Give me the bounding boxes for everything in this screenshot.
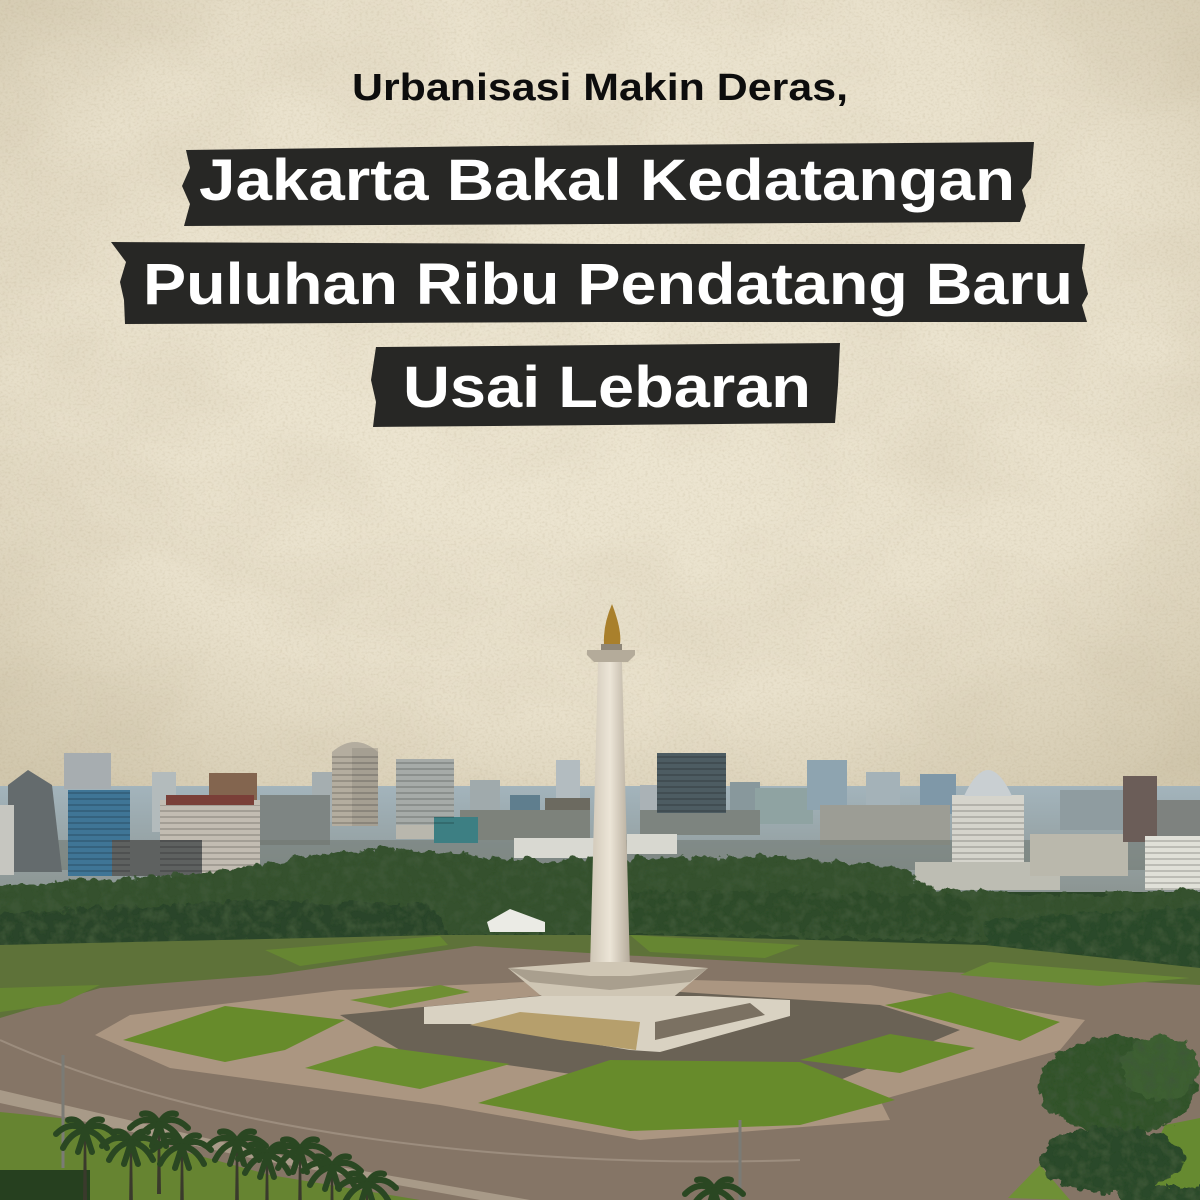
monument: Monas tower xyxy=(424,604,790,1052)
heading: torn label line 2 xyxy=(111,242,1088,324)
lamp posts xyxy=(63,1055,740,1200)
far left buildings xyxy=(0,753,260,876)
distant buildings xyxy=(0,760,1200,870)
heading: torn label line 1 xyxy=(182,142,1034,226)
heading: torn label line 1: Jakarta Bakal Kedatangan xyxy=(199,148,1015,213)
patterned glass building xyxy=(657,753,726,813)
lower left grass xyxy=(0,1090,530,1200)
heading: torn label line 3: Usai Lebaran xyxy=(403,355,811,420)
heading: torn label line 2: Puluhan Ribu Pendatang Baru xyxy=(143,252,1073,317)
tree band backing xyxy=(0,892,1200,1002)
right buildings xyxy=(915,770,1200,890)
lawns behind the monument xyxy=(0,935,1190,1012)
ground and road xyxy=(0,935,1200,1200)
tree band xyxy=(0,848,1200,970)
white tent xyxy=(487,909,545,932)
paper background xyxy=(0,0,1200,800)
centre-left towers xyxy=(332,742,677,858)
trees lower right xyxy=(1008,1036,1200,1200)
icon: gold flame xyxy=(604,604,620,644)
plaza xyxy=(95,978,1085,1140)
monument lower platform xyxy=(424,996,790,1052)
monument cup base xyxy=(508,962,708,1012)
lawns on the plaza xyxy=(123,985,1060,1131)
heading: torn label line 3 xyxy=(371,343,840,427)
road markings xyxy=(0,1040,800,1162)
heading: kicker: Urbanisasi Makin Deras, xyxy=(352,67,848,109)
city skyline xyxy=(0,742,1200,896)
palm trees xyxy=(0,1113,743,1200)
